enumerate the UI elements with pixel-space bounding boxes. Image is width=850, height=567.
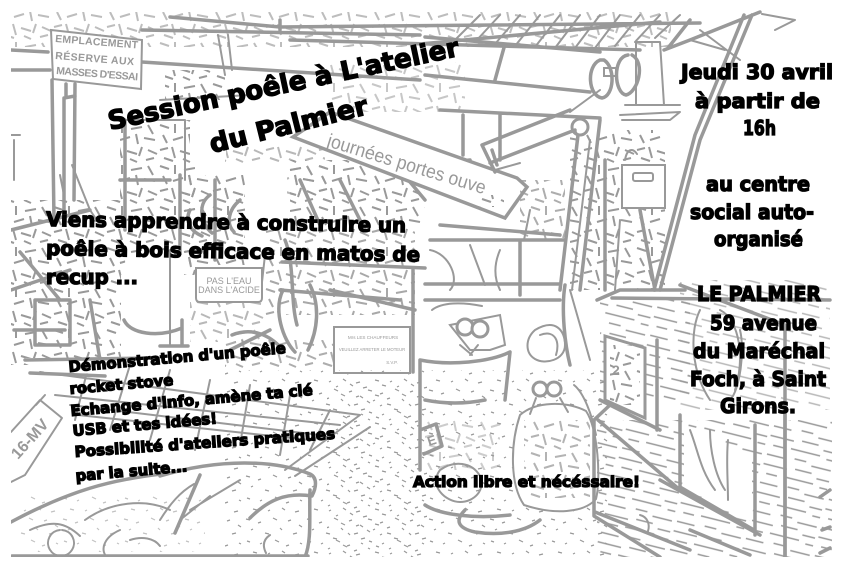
programme list: Démonstration d'un poêle: [68, 339, 287, 376]
sign: chauffeurs: S.V.P.: [386, 360, 398, 365]
programme list: par la suite...: [75, 457, 188, 485]
venue: organisé: [714, 227, 803, 251]
plant leaves: [185, 175, 245, 265]
floor grid: [25, 358, 370, 476]
masks: [590, 42, 680, 120]
intro text: recup ...: [46, 265, 138, 289]
sign: emplacement: EMPLACEMENT: [55, 33, 139, 52]
sign: pas l'eau: DANS L'ACIDE: [198, 285, 260, 295]
programme list: Echange d'info, amène ta clé: [70, 381, 313, 420]
shelves left: [120, 120, 325, 280]
intro text: poêle à bois efficace en matos de: [46, 236, 420, 267]
date and time: 16h: [743, 116, 776, 140]
wooden wall upper right: [612, 280, 830, 557]
intro text: [46, 207, 420, 289]
slogan: Action libre et nécéssaire!: [413, 473, 640, 491]
venue: social auto-: [690, 200, 814, 224]
door panel with chalkboard: [594, 290, 690, 557]
hanging cables column: [560, 120, 665, 290]
sign: chauffeurs: Mrs LES CHAUFFEURS: [348, 335, 398, 340]
door panel with chalkboard: 2: [612, 362, 620, 378]
windows and back wall: [125, 35, 600, 180]
gas mask on barrel: [432, 303, 505, 355]
floor: [225, 370, 610, 560]
venue: [690, 172, 814, 251]
intro text: Viens apprendre à construire un: [46, 207, 406, 237]
number plate: [8, 395, 62, 482]
address: LE PALMIER: [697, 282, 821, 306]
roof beams: [11, 12, 795, 290]
board: journées portes ouvertes: journées portes ouve: [324, 130, 488, 199]
sign: emplacement: RÉSERVE AUX: [55, 49, 136, 68]
left clutter and cabinet: [11, 200, 188, 365]
sign: emplacement: MASSES D'ESSAI: [56, 65, 139, 84]
box with handle: [622, 150, 665, 208]
figure and basket: [225, 285, 335, 370]
white post: [11, 80, 100, 225]
saw frame: [482, 90, 600, 172]
programme list: rocket stove: [69, 371, 174, 398]
address: Foch, à Saint: [690, 367, 826, 391]
address: 59 avenue: [710, 311, 817, 335]
old car: [11, 463, 316, 558]
date and time: à partir de: [695, 89, 820, 113]
venue: au centre: [706, 172, 810, 196]
cables over barrel: [528, 285, 590, 365]
address: [690, 282, 826, 418]
date and time: [679, 60, 833, 140]
clutter centre: [265, 160, 425, 325]
programme list: USB et tes idées!: [72, 409, 218, 440]
barrel: E: [425, 432, 438, 449]
address: Girons.: [720, 394, 796, 418]
sign: pas l'eau: PAS L'EAU: [206, 276, 252, 286]
number plate: 16-MV: [8, 416, 53, 463]
board: journées portes ouvertes: [293, 112, 527, 218]
date and time: Jeudi 30 avril: [679, 60, 833, 84]
barrel: [420, 352, 540, 534]
programme list: [68, 339, 336, 485]
sign: chauffeurs: VEUILLEZ ARRETER LE MOTEUR: [339, 347, 405, 352]
shelf and objects right centre: [425, 180, 565, 300]
programme list: Possibilité d'ateliers pratiques: [74, 425, 336, 461]
title: Session poêle à L'atelier: [105, 33, 462, 137]
sign: pas l'eau: [170, 250, 265, 345]
sign: emplacement: [51, 30, 142, 89]
title: du Palmier: [206, 91, 371, 160]
gas bottle with gauges: [513, 382, 598, 511]
address: du Maréchal: [693, 339, 825, 363]
sign: chauffeurs: [330, 270, 415, 373]
wooden door lower: [595, 410, 832, 557]
